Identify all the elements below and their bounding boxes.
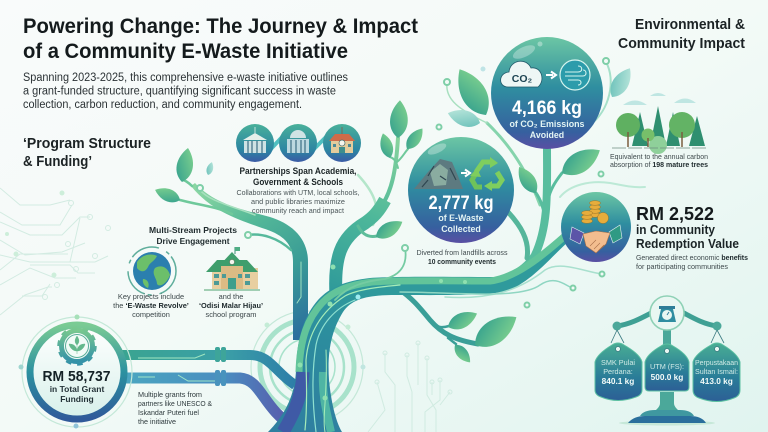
- description: Collaborations with UTM, local schools,: [236, 188, 360, 197]
- concentric rings behind trunk: [251, 311, 366, 423]
- tag: Perpustakaan Sultan Ismail: Perpustakaan: [695, 360, 738, 367]
- tag: Perpustakaan Sultan Ismail: Sultan Ismail:: [695, 369, 738, 376]
- label: of CO₂ Emissions: [510, 119, 585, 129]
- section heading: environmental impact: Community Impact: [618, 35, 745, 52]
- main trunk: [268, 232, 570, 432]
- label: [438, 213, 484, 234]
- title: of a Community E-Waste Initiative: [23, 39, 348, 63]
- icon: gear with sprout: [59, 328, 95, 364]
- label: [636, 222, 739, 251]
- value: 2,777 kg: [428, 193, 494, 214]
- intro text: a grant-funded structure, quantifying significant success in waste: [23, 86, 336, 98]
- pipes from funding to trunk: [120, 347, 295, 428]
- lower branch: [400, 290, 478, 344]
- label: [510, 119, 585, 140]
- leaves: [153, 63, 637, 366]
- intro text: collection, carbon reduction, and community engagement.: [23, 99, 302, 111]
- icons: institutions: [236, 124, 361, 162]
- scale stand and base: [611, 311, 724, 426]
- tag: SMK Pulai Perdana: 840.1 kg: [602, 376, 634, 386]
- section heading: program structure: ‘Program Structure: [23, 135, 151, 152]
- caption: odisi malar hijau: [199, 292, 263, 319]
- value: 4,166 kg: [512, 98, 582, 119]
- funding label: Funding: [60, 394, 94, 404]
- heading: Drive Engagement: [156, 236, 230, 246]
- section heading: environmental impact: [618, 16, 745, 52]
- caption: equivalent trees: [610, 152, 708, 169]
- text: multiple grants: Iskandar Puteri fuel: [138, 408, 199, 417]
- section heading: program structure: [23, 135, 151, 170]
- heading: [149, 225, 237, 246]
- caption: odisi malar hijau: and the: [219, 292, 243, 301]
- caption: diverted from landfills: [416, 248, 508, 266]
- trunk circuit traces: [313, 300, 355, 432]
- left branch: [191, 183, 308, 340]
- icon: waste pile to recycle: [414, 157, 502, 191]
- heading: Multi-Stream Projects: [149, 225, 237, 235]
- tag: SMK Pulai Perdana: SMK Pulai: [601, 358, 635, 367]
- icon: CO2 cloud to clean air: CO₂: [512, 73, 533, 85]
- funding amount: RM 58,737: [42, 368, 110, 385]
- title: [23, 14, 418, 63]
- description: for participating communities: [636, 262, 728, 271]
- description: [236, 188, 360, 215]
- label: Collected: [441, 224, 481, 234]
- bubble stems: [480, 148, 547, 285]
- caption: e-waste revolve: [113, 292, 189, 319]
- intro text: [23, 72, 348, 111]
- caption: e-waste revolve: competition: [132, 310, 170, 319]
- bubble: CO2 avoided: [491, 37, 603, 149]
- caption: e-waste revolve: Key projects include: [118, 292, 184, 301]
- text: multiple grants: [138, 390, 212, 426]
- description: Generated direct economic benefits: [636, 253, 748, 262]
- title: Powering Change: The Journey & Impact: [23, 14, 418, 38]
- upper right branch: [336, 200, 385, 295]
- funding label: [50, 384, 104, 404]
- tree: [180, 58, 645, 432]
- panel: total grant funding: [18, 314, 132, 428]
- icon: school: [204, 247, 260, 290]
- text: multiple grants: Multiple grants from: [138, 390, 202, 399]
- caption: equivalent trees: Equivalent to the annual carbon: [610, 152, 708, 161]
- tag: UTM (FS): UTM (FS):: [650, 362, 684, 371]
- label: of E-Waste: [438, 213, 484, 223]
- tag: UTM (FS): 500.0 kg: [651, 372, 683, 382]
- trunk colour bands: [299, 235, 566, 372]
- tag: SMK Pulai Perdana: Perdana:: [603, 367, 633, 376]
- icon: forest: [612, 93, 708, 154]
- label: Avoided: [530, 130, 564, 140]
- tag: UTM (FS): [645, 344, 689, 391]
- caption: equivalent trees: absorption of 198 mature trees: [610, 160, 708, 169]
- panel: multi-stream projects: [113, 225, 263, 319]
- caption: e-waste revolve: the ‘E-Waste Revolve’: [113, 301, 189, 310]
- heading: [240, 166, 356, 187]
- panel: community redemption text: [636, 203, 748, 271]
- caption: diverted from landfills: Diverted from landfills across: [416, 248, 508, 257]
- description: [636, 253, 748, 271]
- label: Redemption Value: [636, 236, 739, 251]
- icon: weighing scale dial: [650, 296, 684, 330]
- heading: Partnerships Span Academia,: [240, 166, 356, 176]
- tag: Perpustakaan Sultan Ismail: [693, 343, 740, 402]
- caption: odisi malar hijau: school program: [206, 310, 256, 319]
- text: multiple grants: the initiative: [138, 417, 176, 426]
- heading: Government & Schools: [253, 177, 343, 187]
- funding label: in Total Grant: [50, 384, 104, 394]
- text: multiple grants: partners like UNESCO &: [138, 399, 212, 408]
- section heading: environmental impact: Environmental &: [635, 16, 745, 33]
- tree nodes: [197, 58, 609, 308]
- circuit pattern: bottom right: [368, 341, 452, 432]
- bubble: community redemption icon: [561, 192, 631, 262]
- value: RM 2,522: [636, 203, 714, 224]
- caption: diverted from landfills: 10 community events: [428, 257, 496, 266]
- panel: partnerships: [236, 124, 361, 215]
- tag: SMK Pulai Perdana: [595, 343, 642, 400]
- circuit pattern: left: [0, 188, 110, 315]
- description: and public libraries maximize: [251, 197, 345, 206]
- intro text: Spanning 2023-2025, this comprehensive e-waste initiative outlines: [23, 72, 348, 84]
- bubble: e-waste collected: [408, 137, 514, 243]
- caption: odisi malar hijau: ‘Odisi Malar Hijau’: [199, 301, 263, 310]
- label: in Community: [636, 222, 716, 237]
- chart: balance scale with collection sites: [595, 296, 740, 426]
- section heading: program structure: & Funding’: [23, 153, 92, 170]
- description: community reach and impact: [252, 206, 345, 215]
- tag: Perpustakaan Sultan Ismail: 413.0 kg: [700, 376, 733, 386]
- icon: globe: [128, 247, 176, 295]
